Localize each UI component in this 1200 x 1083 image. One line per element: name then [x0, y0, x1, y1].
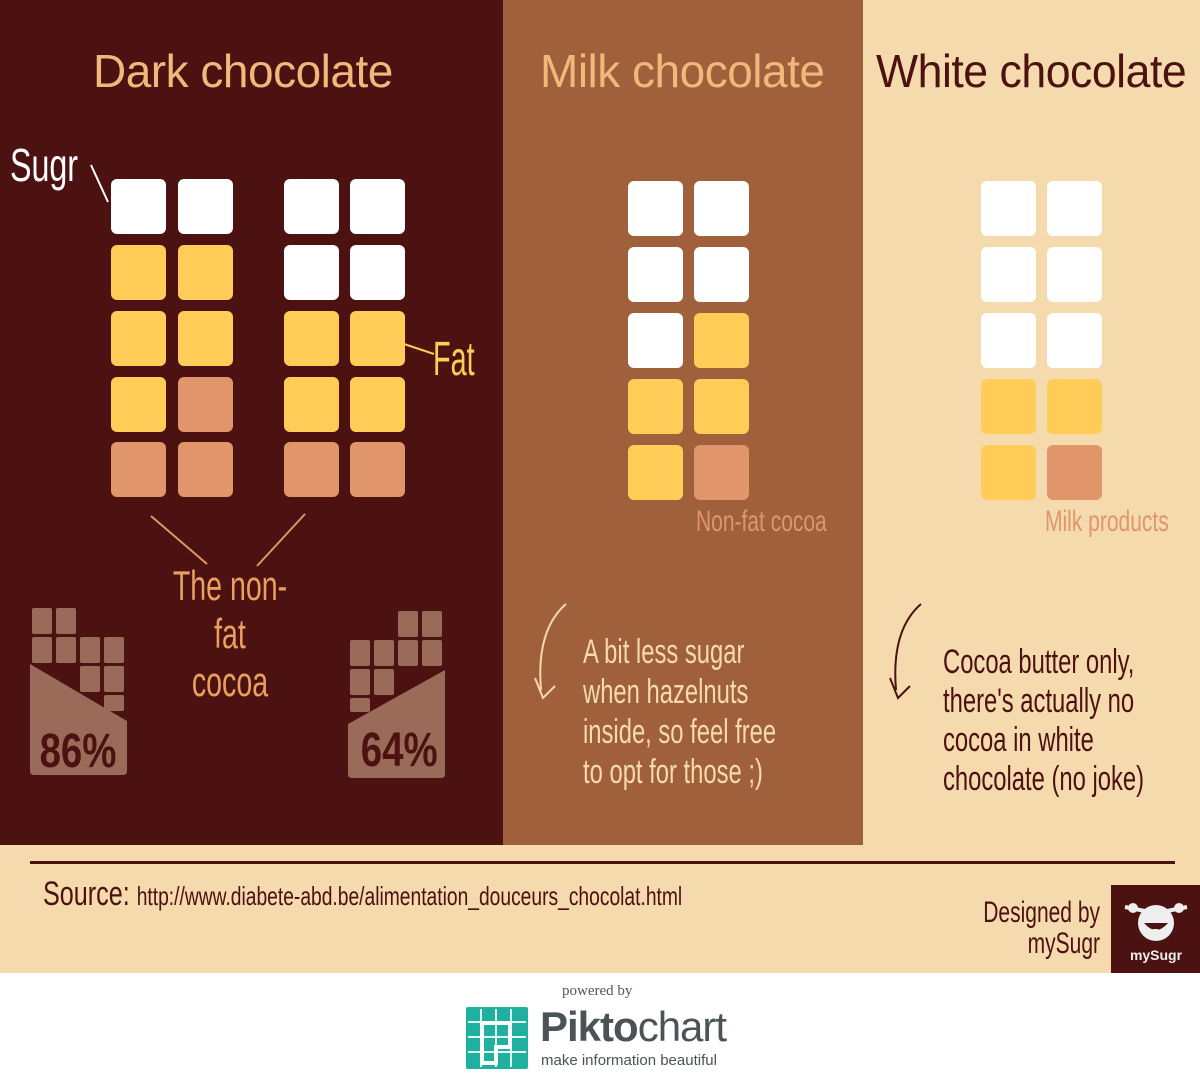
text white note: Cocoa butter only, [943, 643, 1134, 681]
text milk note: inside, so feel free [583, 713, 776, 751]
powered by piktochart: make information beautiful [541, 1052, 717, 1069]
label: the non-fat cocoa: cocoa [192, 658, 268, 705]
panel: white chocolate [863, 0, 1200, 845]
squares group 1 (86%) [111, 179, 233, 497]
icon: chocolate bar 86% [30, 608, 127, 777]
text milk note: to opt for those ;) [583, 753, 763, 791]
icon: piktochart logo [466, 1007, 528, 1069]
source text: Source: http://www.diabete-abd.be/alimentation_douceurs_chocolat.html [43, 875, 682, 913]
arrow white [889, 603, 922, 700]
panel: dark chocolate [0, 0, 503, 845]
footer band [0, 845, 1200, 973]
title: dark chocolate: Dark chocolate [93, 45, 393, 97]
icon: chocolate bar 64% [348, 611, 445, 778]
squares white [981, 181, 1102, 500]
text milk note: A bit less sugar [583, 633, 744, 671]
title: milk chocolate: Milk chocolate [540, 45, 824, 97]
text white note: there's actually no [943, 682, 1134, 720]
logo mysugr: mySugr [1130, 947, 1183, 963]
label: non-fat cocoa: Non-fat cocoa [696, 505, 827, 538]
panel: milk chocolate [503, 0, 863, 845]
powered by piktochart: Piktochart [540, 1003, 726, 1050]
pointer line fat [405, 343, 434, 355]
label: the non-fat cocoa: fat [214, 610, 246, 657]
label: sugr: Sugr [10, 139, 78, 191]
squares milk [628, 181, 749, 500]
text white note: cocoa in white [943, 721, 1094, 759]
designed by [983, 896, 1100, 960]
text milk note [583, 633, 776, 791]
label: milk products: Milk products [1045, 505, 1169, 538]
text white note [943, 643, 1144, 798]
icon: chocolate bar 64%: 64% [361, 724, 438, 777]
title: white chocolate: White chocolate [876, 45, 1186, 97]
squares group 2 (64%) [284, 179, 405, 497]
logo mysugr [1111, 885, 1200, 973]
label: fat: Fat [433, 333, 475, 386]
designed by: Designed by [983, 896, 1100, 929]
pointer lines non-fat cocoa [150, 513, 306, 567]
designed by: mySugr [1028, 927, 1100, 960]
powered by piktochart [466, 983, 727, 1069]
label: the non-fat cocoa: The non- [173, 562, 287, 609]
text milk note: when hazelnuts [583, 673, 748, 711]
label: the non-fat cocoa [173, 562, 287, 705]
pointer line sugr [90, 164, 109, 202]
icon: chocolate bar 86%: 86% [40, 725, 116, 777]
arrow milk [534, 603, 567, 700]
powered by piktochart: powered by [562, 983, 632, 999]
text white note: chocolate (no joke) [943, 760, 1144, 798]
